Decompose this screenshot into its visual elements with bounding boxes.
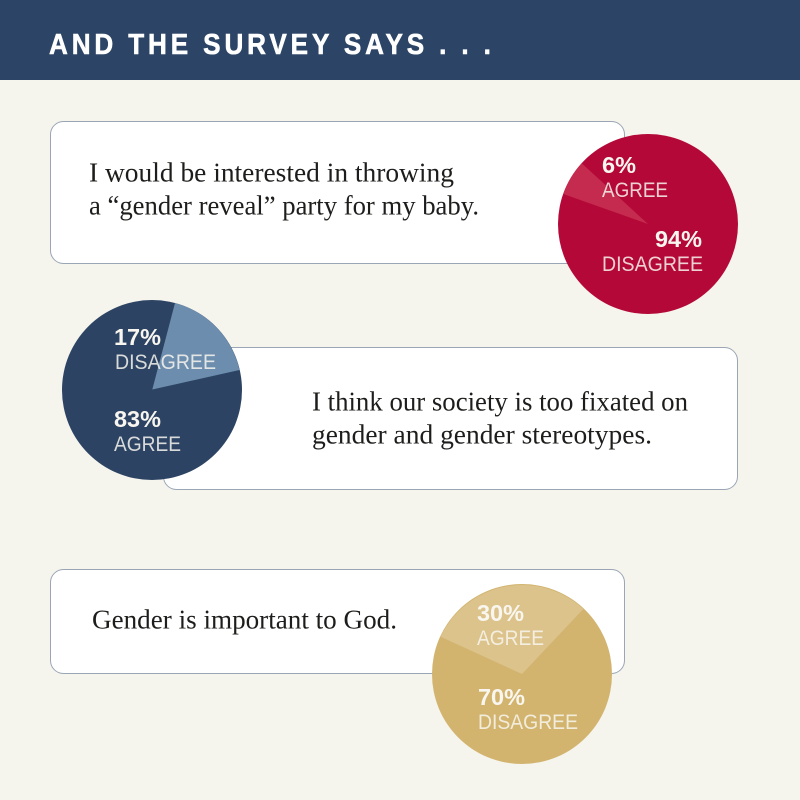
label: 94% disagree: 94% [655,226,702,252]
label: 70% disagree: 70% [478,684,525,710]
pie chart: 94% disagree, 6% agree [558,134,738,314]
label: 30% agree [477,600,544,650]
statement text: I think our society is too fixated on [312,386,688,416]
label: 30% agree: AGREE [477,627,544,650]
label: 70% disagree: DISAGREE [478,711,578,734]
statement text: a “gender reveal” party for my baby. [89,190,479,220]
panel: gender important to God statement [50,570,624,674]
label: 83% agree [114,406,181,456]
label: 17% disagree: DISAGREE [115,351,216,374]
statement text: Gender is important to God. [92,604,397,634]
title: AND THE SURVEY SAYS . . . [49,28,491,60]
label: 6% agree: AGREE [602,179,668,202]
pie chart: 83% agree, 17% disagree [62,300,242,480]
label: 6% agree: 6% [602,152,636,178]
label: 83% agree: AGREE [114,433,181,456]
label: 70% disagree [478,684,578,734]
statement text: I would be interested in throwing [89,156,454,188]
statement text [89,156,479,220]
label: 6% agree [602,152,668,202]
statement text: gender and gender stereotypes. [312,418,652,450]
panel: gender reveal statement [50,122,624,264]
label: 17% disagree [114,324,216,374]
label: 94% disagree [602,226,703,276]
statement text [312,386,688,450]
label: 17% disagree: 17% [114,324,161,350]
label: 30% agree: 30% [477,600,524,626]
pie chart: 70% disagree, 30% agree [432,584,612,764]
label: 83% agree: 83% [114,406,161,432]
label: 94% disagree: DISAGREE [602,253,703,276]
header band [0,0,800,80]
panel: fixated on gender statement [164,348,738,490]
